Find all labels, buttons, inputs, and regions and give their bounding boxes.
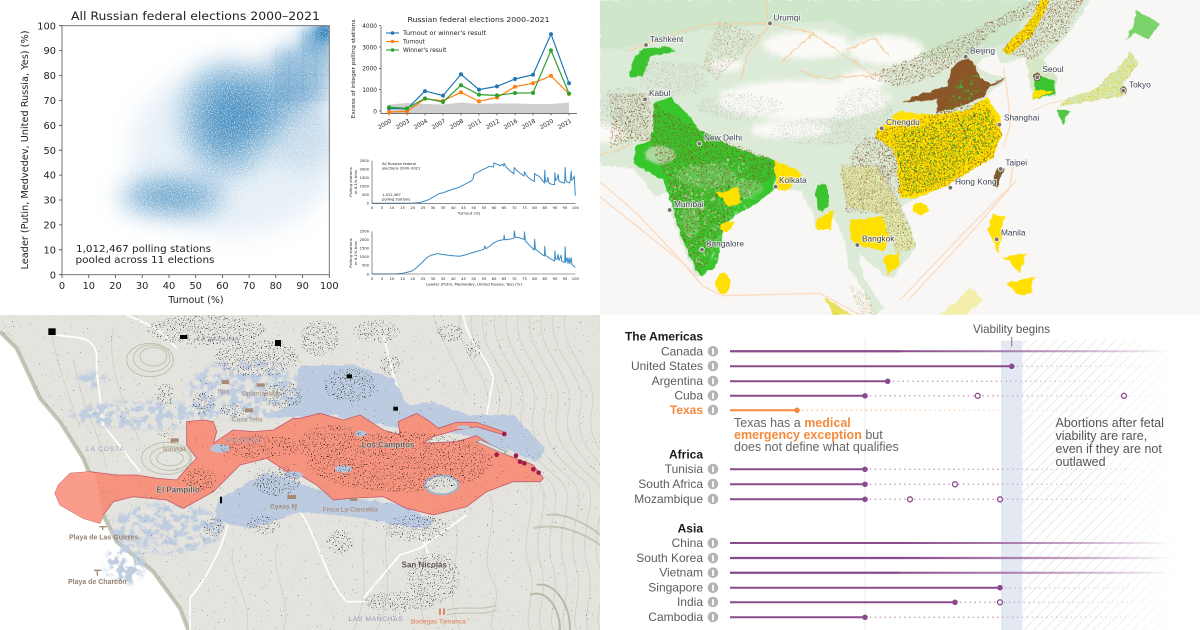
viability note: Abortions after fetal [1056, 416, 1164, 430]
hollow dots [908, 393, 1126, 605]
map north-east China corridor [1002, 0, 1050, 55]
leader histogram x labels: 20 [410, 277, 416, 281]
leader histogram x labels: 90 [553, 277, 558, 281]
line chart year labels: 2020 [539, 118, 555, 131]
lava map POI icons [94, 380, 357, 576]
viability note: even if they are not [1056, 442, 1162, 456]
map city labels and markers: Bangalore [706, 239, 744, 249]
map city labels and markers: Tashkent [650, 34, 684, 44]
hatch fade [1090, 338, 1184, 630]
scatter x tick labels: 60 [216, 281, 229, 292]
series: winner's result [387, 48, 571, 110]
leader histogram x labels: 60 [492, 277, 497, 281]
line chart y axis label: Excess of integer polling stations [351, 19, 357, 118]
turnout histogram axis labels [348, 167, 481, 216]
turnout histogram axis labels: Polling stations [348, 167, 353, 197]
big black buildings [48, 328, 398, 503]
dotted extensions [797, 366, 1172, 617]
line chart y tick labels: 0 [373, 109, 377, 115]
turnout histogram x labels: 30 [431, 206, 436, 210]
leader histogram axis labels [348, 238, 522, 286]
panel: abortion limits lollipop chart [625, 322, 1184, 630]
map North China brown plain [903, 57, 1007, 113]
turnout histogram y labels: 1500 [360, 176, 370, 180]
map land mass [600, 0, 1090, 315]
lava map place labels: Oplantasalgo [242, 391, 281, 398]
map China speckle green [893, 107, 997, 197]
scatter x tick labels: 50 [189, 281, 202, 292]
country labels: Cambodia [648, 610, 703, 624]
turnout histogram note: All Russian federal [382, 162, 416, 166]
turnout histogram x labels: 95 [563, 206, 568, 210]
leader histogram x labels: 10 [390, 277, 395, 281]
map Korea [1025, 58, 1057, 100]
lava map white roads [57, 315, 493, 630]
turnout histogram x labels: 90 [553, 206, 558, 210]
lava lobe into the ocean [55, 472, 103, 523]
panel: Asia crop map [590, 0, 1200, 315]
viability band [1001, 341, 1022, 630]
info icons [708, 346, 718, 622]
lava map place labels: sonvida [163, 446, 186, 453]
viability note: viability are rare, [1056, 429, 1147, 443]
leader histogram x labels [371, 277, 579, 281]
lava map place labels: Los Campitos [362, 440, 415, 449]
viability note: outlawed [1056, 455, 1106, 469]
leader histogram axes [372, 231, 575, 274]
line chart legend: Turnout [402, 40, 426, 46]
scatter x tick labels: 20 [109, 281, 122, 292]
leader histogram x labels: 80 [532, 277, 538, 281]
map Taiwan [993, 168, 1003, 188]
solid dots [862, 364, 1014, 620]
line chart legend [386, 31, 487, 54]
panel: La Palma lava flow map [0, 315, 637, 630]
map shipping lanes [600, 67, 1067, 315]
map city labels and markers: Hong Kong [955, 176, 997, 186]
panel: excess integer polling stations line chart [351, 15, 577, 131]
hatched post-viability zone [1022, 340, 1182, 630]
lava map place labels: LA COSTA [86, 446, 125, 453]
leader histogram x labels: 65 [502, 277, 507, 281]
map sea background [600, 0, 1200, 315]
panel: turnout histogram [348, 159, 579, 216]
map brown sparse speckle [610, 0, 1083, 213]
map city labels and markers [643, 13, 1151, 252]
leader histogram x labels: 35 [441, 277, 446, 281]
turnout histogram x labels: 80 [532, 206, 538, 210]
panel: leader histogram [348, 230, 579, 286]
line chart legend: Turnout or winner's result [402, 31, 487, 37]
turnout histogram x labels: 25 [421, 206, 426, 210]
country labels: Cuba [674, 388, 703, 402]
lava flow holes [210, 426, 507, 494]
region heading: The Americas: The Americas [625, 330, 703, 344]
map North China green [943, 75, 983, 112]
lava map place labels: Casas M [270, 503, 297, 510]
turnout histogram x labels: 40 [451, 206, 456, 210]
icon: winery glasses [440, 608, 444, 615]
scatter x tick labels: 40 [163, 281, 175, 292]
grey baseline area [389, 102, 569, 113]
scatter x axis label: Turnout (%) [167, 295, 224, 306]
leader histogram x labels: 0 [371, 277, 374, 281]
reference line [864, 338, 866, 630]
leader histogram axis labels: Polling stations [348, 238, 353, 268]
scatter axes frame [62, 26, 329, 275]
map Indochina pale yellow [840, 167, 917, 253]
map city labels and markers: Taipei [1005, 157, 1027, 167]
turnout histogram x labels: 5 [381, 206, 384, 210]
line chart year labels: 2008 [449, 118, 465, 131]
scatter x tick labels: 90 [296, 281, 309, 292]
scatter y tick labels [37, 21, 56, 281]
Texas note [734, 416, 899, 454]
lava map contour lines [50, 315, 637, 630]
country labels: Texas [670, 403, 703, 417]
lava map place labels: LA LAGUNA [197, 336, 240, 343]
turnout histogram note [382, 162, 420, 202]
lava map land background [0, 315, 600, 630]
country labels: Vietnam [659, 566, 703, 580]
leader histogram x labels: 25 [421, 277, 426, 281]
map desert white areas [590, 31, 923, 143]
line chart year labels [377, 118, 573, 131]
map Japan [1055, 10, 1160, 125]
map city labels and markers: New Delhi [704, 132, 742, 142]
map city labels and markers: Manila [1001, 228, 1026, 238]
leader histogram x labels: 75 [522, 277, 527, 281]
leader histogram y labels: 0 [367, 272, 370, 276]
lava map blue ash haze: core [213, 365, 545, 528]
leader histogram x labels: 40 [451, 277, 456, 281]
leader histogram y labels: 2500 [360, 230, 370, 234]
series: turnout or winner's result [387, 32, 571, 111]
turnout histogram x labels: 0 [371, 206, 374, 210]
turnout histogram note: polling stations [382, 198, 410, 202]
lava vents [494, 432, 541, 475]
leader histogram x labels: 5 [381, 277, 384, 281]
scatter x tick labels [59, 281, 339, 292]
turnout histogram note: 1,012,467 [382, 193, 401, 197]
lava map place labels: Casa Tella [232, 417, 263, 424]
leader histogram axis labels: Leader (Putin, Medvedev, United Russia, Yes) (%) [426, 282, 522, 286]
turnout histogram x labels: 100 [572, 206, 579, 210]
leader histogram x labels: 30 [431, 277, 436, 281]
scatter y tick labels: 40 [44, 171, 56, 182]
lava map place labels: Bodegas Tamanca [411, 618, 466, 625]
scatter density cloud [120, 17, 356, 235]
map Indonesia islands [823, 283, 983, 315]
map Myanmar green [816, 183, 829, 211]
leader histogram x labels: 70 [512, 277, 517, 281]
Texas note: emergency exception but [734, 428, 883, 442]
country labels: United States [631, 359, 703, 373]
region heading: Asia: Asia [678, 522, 703, 536]
Texas line [730, 408, 800, 413]
scatter tick marks [59, 26, 329, 278]
leader histogram x labels: 85 [542, 277, 548, 281]
map city labels and markers: Chengdu [886, 117, 920, 127]
line chart year labels: 2003 [395, 118, 411, 131]
country labels: South Korea [636, 551, 703, 565]
series: turnout [387, 74, 571, 114]
line chart y tick labels: 4000 [362, 24, 377, 30]
viability tick [1011, 337, 1013, 346]
map Uzbek and Tashkent green [630, 47, 675, 77]
map Philippines [988, 213, 1033, 295]
leader histogram y labels [360, 230, 370, 276]
turnout histogram note: elections 2000–2021 [382, 166, 420, 170]
line chart year labels: 2004 [413, 118, 429, 131]
turnout histogram x labels: 75 [522, 206, 527, 210]
scatter y tick labels: 80 [44, 71, 56, 82]
line chart year labels: 2007 [431, 118, 447, 131]
map India wheat green [633, 97, 777, 277]
lava map place labels: El Pampillo [157, 486, 200, 495]
leader histogram x labels: 55 [482, 277, 487, 281]
map city labels and markers: Urumqi [773, 13, 800, 23]
map yellow rice areas south and east Asia [716, 97, 1002, 294]
map Indochina brown speckle [840, 163, 917, 253]
country labels: Singapore [648, 580, 703, 594]
map India light central patches [645, 146, 763, 238]
scatter y tick labels: 60 [44, 121, 56, 132]
lava map place labels: TODOQUE [224, 437, 262, 444]
scatter x tick labels: 100 [320, 281, 339, 292]
scatter x tick labels: 10 [83, 281, 95, 292]
map India mottling [663, 157, 757, 270]
Texas note: does not define what qualifies [734, 440, 899, 454]
map city labels and markers: Mumbai [674, 199, 704, 209]
scatter annotation: pooled across 11 elections [76, 255, 215, 266]
country labels: Canada [661, 344, 703, 358]
turnout histogram x labels: 20 [410, 206, 416, 210]
turnout histogram x labels: 65 [502, 206, 507, 210]
turnout histogram y labels [360, 159, 370, 206]
map city labels and markers: Kolkata [779, 175, 807, 185]
leader histogram axis labels: in 0.1% bins [353, 241, 358, 265]
leader histogram y labels: 2000 [360, 238, 370, 242]
map city labels and markers: Tokyo [1129, 79, 1151, 89]
line chart y tick labels: 2000 [362, 67, 377, 73]
scatter x tick labels: 80 [270, 281, 282, 292]
line chart legend: Winner's result [403, 48, 447, 54]
turnout histogram curve [372, 163, 575, 203]
leader histogram x labels: 50 [471, 277, 477, 281]
turnout histogram x labels [371, 206, 579, 210]
map pale north-west steppe [600, 0, 1033, 60]
lava flow polygon [55, 413, 543, 523]
scatter y tick labels: 90 [44, 46, 56, 57]
lava map sea [0, 332, 188, 630]
line chart y tick labels: 1000 [362, 88, 377, 94]
viability note [1056, 416, 1164, 469]
turnout histogram x labels: 60 [492, 206, 497, 210]
scatter title: All Russian federal elections 2000–2021 [71, 9, 320, 23]
leader histogram y labels: 1500 [360, 247, 370, 251]
scatter y tick labels: 20 [44, 220, 56, 232]
turnout histogram y labels: 0 [367, 202, 370, 206]
turnout histogram axis labels: in 0.1% bins [353, 170, 358, 194]
country labels: South Africa [638, 477, 703, 491]
lava map place labels [68, 336, 466, 625]
line chart y tick labels [362, 24, 377, 115]
country labels: China [672, 536, 703, 550]
turnout histogram x labels: 55 [482, 206, 487, 210]
lava map scattered buildings [0, 315, 600, 630]
line chart year labels: 2012 [485, 118, 501, 131]
viability label: Viability begins [973, 322, 1050, 336]
country labels [631, 344, 703, 624]
turnout histogram y labels: 500 [362, 193, 370, 197]
leader histogram curve [372, 231, 575, 274]
map India brown speckle [650, 103, 777, 277]
Texas note: Texas has a medical [734, 416, 851, 430]
scatter annotation [76, 244, 215, 266]
country labels: Mozambique [634, 492, 703, 506]
line chart year labels: 2011 [467, 118, 483, 131]
line chart year labels: 2018 [521, 118, 537, 131]
leader histogram y labels: 500 [362, 264, 370, 268]
map China speckle brown [875, 100, 1002, 197]
scatter y tick labels: 50 [44, 146, 56, 157]
scatter y tick labels: 0 [50, 270, 56, 281]
line chart title: Russian federal elections 2000–2021 [408, 15, 550, 24]
turnout histogram x labels: 10 [390, 206, 395, 210]
map interior roads [600, 0, 890, 155]
turnout histogram x labels: 50 [471, 206, 477, 210]
turnout histogram x labels: 15 [400, 206, 405, 210]
lava map hill contour clusters [127, 343, 600, 630]
turnout histogram axis labels: Turnout (%) [457, 210, 481, 216]
solid purple legal-limit lines [730, 351, 1172, 617]
line chart year labels: 2021 [557, 118, 573, 131]
map city labels and markers: Beijing [970, 45, 995, 55]
leader histogram x labels: 15 [400, 277, 405, 281]
lava map place labels: San Nicolás [402, 560, 447, 569]
map city labels and markers: Kabul [649, 88, 670, 98]
turnout histogram x labels: 45 [461, 206, 466, 210]
leader histogram x labels: 95 [563, 277, 568, 281]
map north-east China brown speckle [1002, 0, 1083, 60]
turnout histogram x labels: 85 [542, 206, 548, 210]
turnout histogram y labels: 2500 [360, 159, 370, 163]
scatter annotation: 1,012,467 polling stations [76, 244, 211, 255]
line chart axes [379, 26, 577, 116]
line chart y tick labels: 3000 [362, 45, 377, 51]
line chart year labels: 2016 [503, 118, 519, 131]
country labels: India [677, 595, 703, 609]
line chart year labels: 2000 [377, 118, 393, 131]
region heading: Africa: Africa [669, 448, 703, 462]
map city labels and markers: Shanghai [1004, 113, 1039, 123]
country labels: Tunisia [665, 462, 703, 476]
lava map coastal cliff band [0, 332, 188, 630]
lava map dense building clusters [147, 315, 493, 612]
scatter x tick labels: 30 [136, 281, 148, 292]
scatter y tick labels: 30 [44, 196, 56, 207]
turnout histogram y labels: 1000 [360, 184, 370, 188]
lava map place labels: Playa de Charcón [68, 579, 127, 586]
scatter x tick labels: 70 [243, 281, 255, 292]
turnout histogram y labels: 2000 [360, 168, 370, 172]
leader histogram x labels: 100 [572, 277, 579, 281]
lava map blue ash haze: patchy fringe [70, 360, 307, 585]
leader histogram x labels: 45 [461, 277, 466, 281]
map city labels and markers: Bangkok [862, 233, 895, 243]
turnout histogram x labels: 35 [441, 206, 446, 210]
map terrain group [590, 0, 1160, 315]
map mountain relief texture [593, 60, 893, 147]
scatter x tick labels: 0 [59, 281, 65, 292]
turnout histogram x labels: 70 [512, 206, 517, 210]
turnout histogram axes [372, 161, 575, 203]
lava map place labels: Spa [217, 388, 229, 395]
scatter y tick labels: 10 [44, 245, 56, 256]
panel: Russian election scatter plot [20, 9, 356, 306]
scatter y axis label: Leader (Putin, Medvedev, United Russia, Yes) (%) [20, 30, 31, 270]
country labels: Argentina [652, 374, 703, 388]
scatter y tick labels: 70 [44, 96, 56, 107]
leader histogram y labels: 1000 [360, 255, 370, 259]
map city labels and markers: Seoul [1042, 64, 1064, 74]
lava map place labels: Finca La Cancelita [323, 507, 378, 514]
lava map place labels: Playa de Las Guirres [69, 534, 138, 541]
scatter y tick labels: 100 [37, 21, 56, 32]
lava map place labels: LAS MANCHAS [348, 616, 403, 623]
